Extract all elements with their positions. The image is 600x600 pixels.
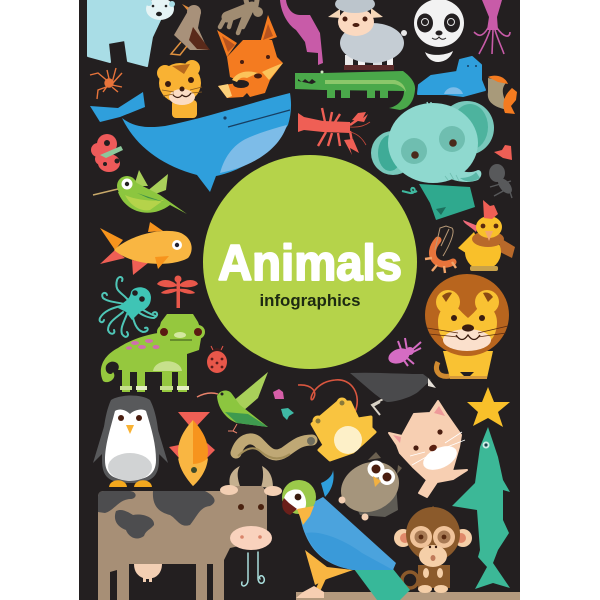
worm (236, 437, 315, 458)
butterfly (91, 134, 123, 172)
goat (220, 0, 262, 33)
subtitle: infographics: infographics (260, 291, 360, 310)
spider (90, 68, 122, 99)
fox (217, 15, 283, 98)
pink bug (386, 338, 421, 366)
red heart (494, 145, 512, 160)
sheep (328, 0, 407, 70)
monkey (394, 506, 472, 593)
hummingbird bottom (197, 372, 268, 433)
squid (474, 0, 510, 54)
squirrel (488, 76, 517, 114)
bottom tan perch (296, 592, 520, 600)
hummingbird top (93, 170, 187, 214)
green circle (203, 155, 417, 369)
whale (90, 92, 291, 192)
yellow fish (100, 222, 192, 275)
orange fish (169, 412, 215, 486)
parrot (282, 470, 410, 600)
lion (425, 274, 509, 379)
seagull (171, 4, 210, 55)
small teal curl (402, 188, 417, 193)
tiger cub (157, 60, 202, 118)
star (467, 387, 510, 427)
cat (389, 401, 467, 497)
teal blob (281, 408, 294, 420)
owl (333, 452, 407, 521)
pink lizard (280, 0, 323, 65)
fly (489, 164, 515, 198)
shark (452, 427, 510, 589)
pink heart (273, 389, 284, 399)
crocodile (295, 70, 415, 110)
title: Animals: Animals (218, 235, 402, 291)
elephant (371, 101, 494, 220)
lobster (298, 108, 370, 155)
rooster (458, 200, 515, 271)
shrimp (425, 226, 456, 273)
dragonfly (157, 276, 198, 308)
dark background panel (79, 0, 520, 600)
crow (350, 373, 436, 415)
frog (312, 398, 375, 460)
octopus (100, 277, 157, 337)
chameleon (101, 314, 205, 392)
panda (414, 0, 464, 62)
red string worm (298, 380, 357, 419)
teal curly insect (242, 552, 264, 586)
polar bear (88, 0, 175, 66)
cow (98, 466, 282, 600)
ladybug (207, 346, 227, 373)
seal (418, 57, 485, 96)
penguin (93, 396, 168, 487)
